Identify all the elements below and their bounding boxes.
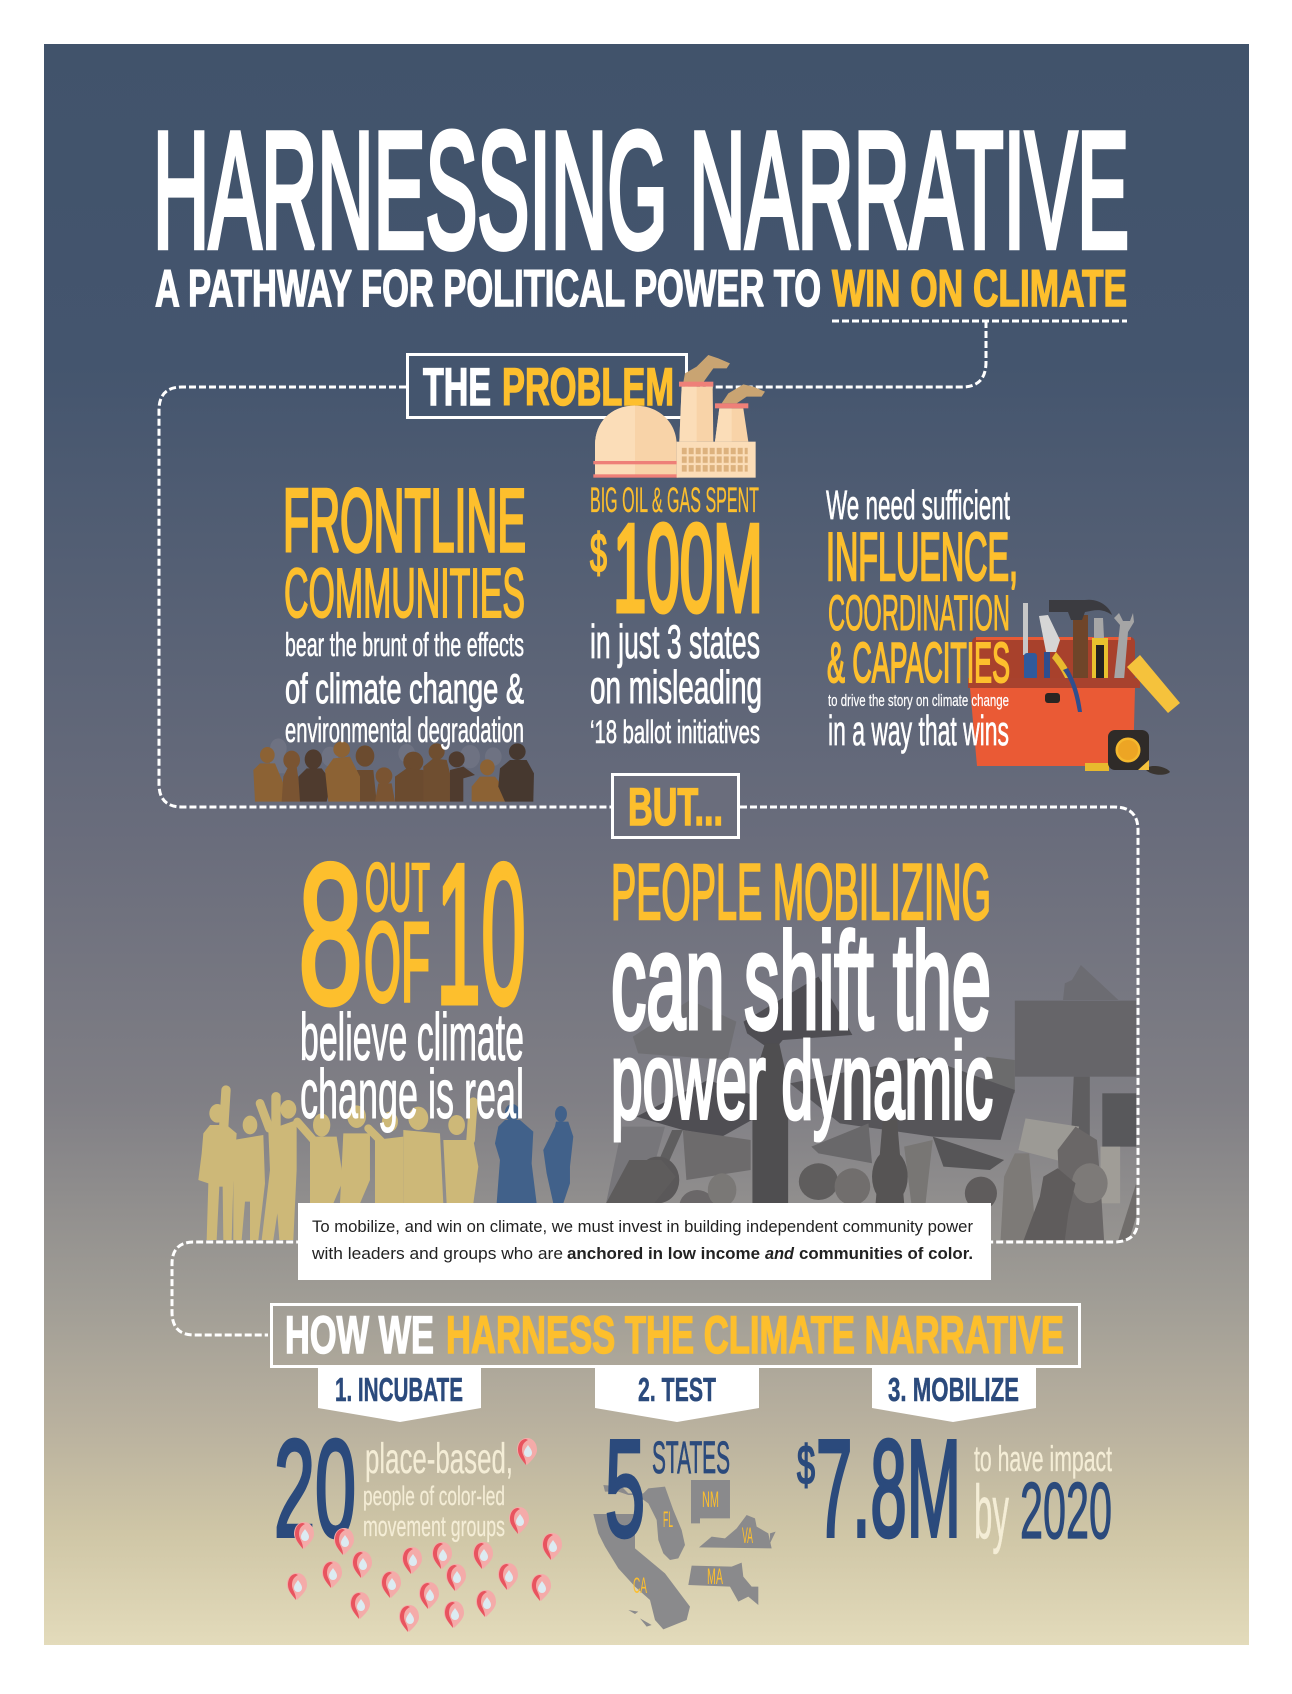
callout: invest in community power: To mobilize, and win on climate, we must invest in building independent community power [312, 1218, 974, 1236]
text block: frontline communities [283, 470, 526, 750]
protest crowd silhouette [606, 965, 1136, 1240]
stat: 20 movement groups: people of color-led [363, 1481, 505, 1511]
callout: invest in community power [298, 1203, 991, 1280]
text block: big oil spending: ‘18 ballot initiatives [590, 714, 760, 750]
step tab: mobilize [872, 1368, 1036, 1422]
heading box: but: BUT... [628, 778, 723, 837]
callout: invest in community power: and [765, 1245, 795, 1263]
text block: influence coordination capacities [826, 482, 1018, 754]
stat: 7.8M by 2020: $ [797, 1434, 815, 1496]
map: New Mexico [691, 1480, 730, 1523]
stat: 8 out of 10: change is real [300, 1055, 524, 1133]
stat: 8 out of 10: 8 [298, 823, 363, 1046]
text block: big oil spending: in just 3 states [590, 615, 760, 668]
stat: 8 out of 10 [298, 823, 526, 1133]
text: BIG OIL & GAS SPENT [590, 481, 759, 520]
stat: 5 states [605, 1412, 730, 1566]
text: STATES [652, 1432, 730, 1483]
text block: frontline communities: bear the brunt of the effects [285, 626, 524, 663]
brown crowd silhouette [253, 738, 534, 802]
subtitle: A PATHWAY FOR POLITICAL POWER TO [155, 260, 821, 318]
pliers [1039, 615, 1082, 712]
blue silhouettes [495, 1104, 573, 1203]
heading box: the problem: THE [423, 358, 491, 417]
map: Virginia [699, 1515, 776, 1548]
stat: 8 out of 10: OF [364, 900, 430, 1025]
stat: 7.8M by 2020: by [974, 1470, 1009, 1555]
map: Massachusetts: MA [707, 1564, 723, 1589]
callout: invest in community power: anchored in low income [567, 1245, 760, 1263]
stat: 8 out of 10: believe climate [300, 1000, 524, 1075]
map: Virginia: VA [742, 1523, 753, 1548]
subtitle: WIN ON CLIMATE [832, 260, 1127, 318]
text: FRONTLINE [283, 470, 526, 570]
statement: people mobilizing [611, 847, 993, 1142]
icon: toolbox [968, 600, 1180, 775]
dashed connector: but to how we harness [172, 807, 1138, 1335]
stat: 7.8M by 2020: 2020 [1020, 1466, 1112, 1555]
text: 100M [613, 500, 763, 638]
callout: invest in community power: with leaders and groups who are [311, 1245, 563, 1263]
map: Florida [603, 1485, 685, 1560]
stat: 7.8M by 2020: 7.8M [816, 1412, 961, 1566]
stat: 7.8M by 2020: to have impact [974, 1438, 1112, 1479]
text block: frontline communities: environmental degradation [285, 711, 524, 750]
step tab: mobilize: 3. MOBILIZE [888, 1371, 1019, 1408]
stat: 20 movement groups: place-based, [365, 1435, 513, 1483]
ruler [1127, 655, 1180, 713]
text: 10 [436, 823, 526, 1046]
map: California: CA [633, 1573, 647, 1598]
utility knife [1092, 618, 1108, 680]
step tab: incubate [318, 1368, 481, 1422]
map: Florida: FL [663, 1507, 673, 1532]
step tab: test [595, 1368, 759, 1422]
stat: 5 states: 5 [605, 1412, 645, 1566]
text: INFLUENCE, [826, 519, 1018, 595]
text: COORDINATION [828, 585, 1010, 641]
icon: power plant [593, 355, 765, 478]
screwdriver [1023, 603, 1037, 680]
stat: 20 movement groups: 20 [274, 1412, 356, 1566]
heading box: the problem [408, 354, 686, 418]
text block: influence coordination capacities: in a way that wins [828, 707, 1009, 754]
step tab: test: 2. TEST [638, 1371, 716, 1408]
heading box: the problem: PROBLEM [502, 358, 674, 417]
tape measure [1085, 730, 1170, 775]
text block: big oil spending: $ [590, 522, 607, 584]
stat: 20 movement groups: movement groups [363, 1511, 505, 1543]
dashed connector: title to problem to but [159, 321, 1127, 807]
text block: influence coordination capacities: We need sufficient [826, 482, 1010, 528]
map: California [593, 1514, 690, 1629]
maps: five states [593, 1480, 776, 1629]
text block: influence coordination capacities: to drive the story on climate change [828, 691, 1009, 710]
stat: 20 movement groups [274, 1412, 513, 1566]
tan crowd silhouette [198, 1090, 478, 1240]
heading box: how we harness: HOW WE [285, 1306, 434, 1365]
icons: map pins [287, 1438, 562, 1632]
hammer [1049, 600, 1112, 680]
power plant windows [682, 448, 748, 473]
text block: big oil spending: on misleading [590, 661, 762, 713]
text block: frontline communities: of climate change & [285, 665, 524, 712]
heading box: how we harness [272, 1304, 1080, 1366]
pliers handle [1063, 668, 1082, 712]
step tab: incubate: 1. INCUBATE [335, 1371, 463, 1408]
text: & CAPACITIES [827, 631, 1010, 695]
callout: invest in community power: communities of color. [799, 1245, 973, 1263]
stat: 8 out of 10: OUT [365, 849, 430, 926]
text block: big oil spending [590, 481, 763, 750]
text: COMMUNITIES [284, 554, 525, 632]
map: Massachusetts [688, 1563, 758, 1605]
wrench [1114, 613, 1134, 680]
heading box: but [612, 774, 738, 838]
map: New Mexico: NM [702, 1487, 719, 1512]
